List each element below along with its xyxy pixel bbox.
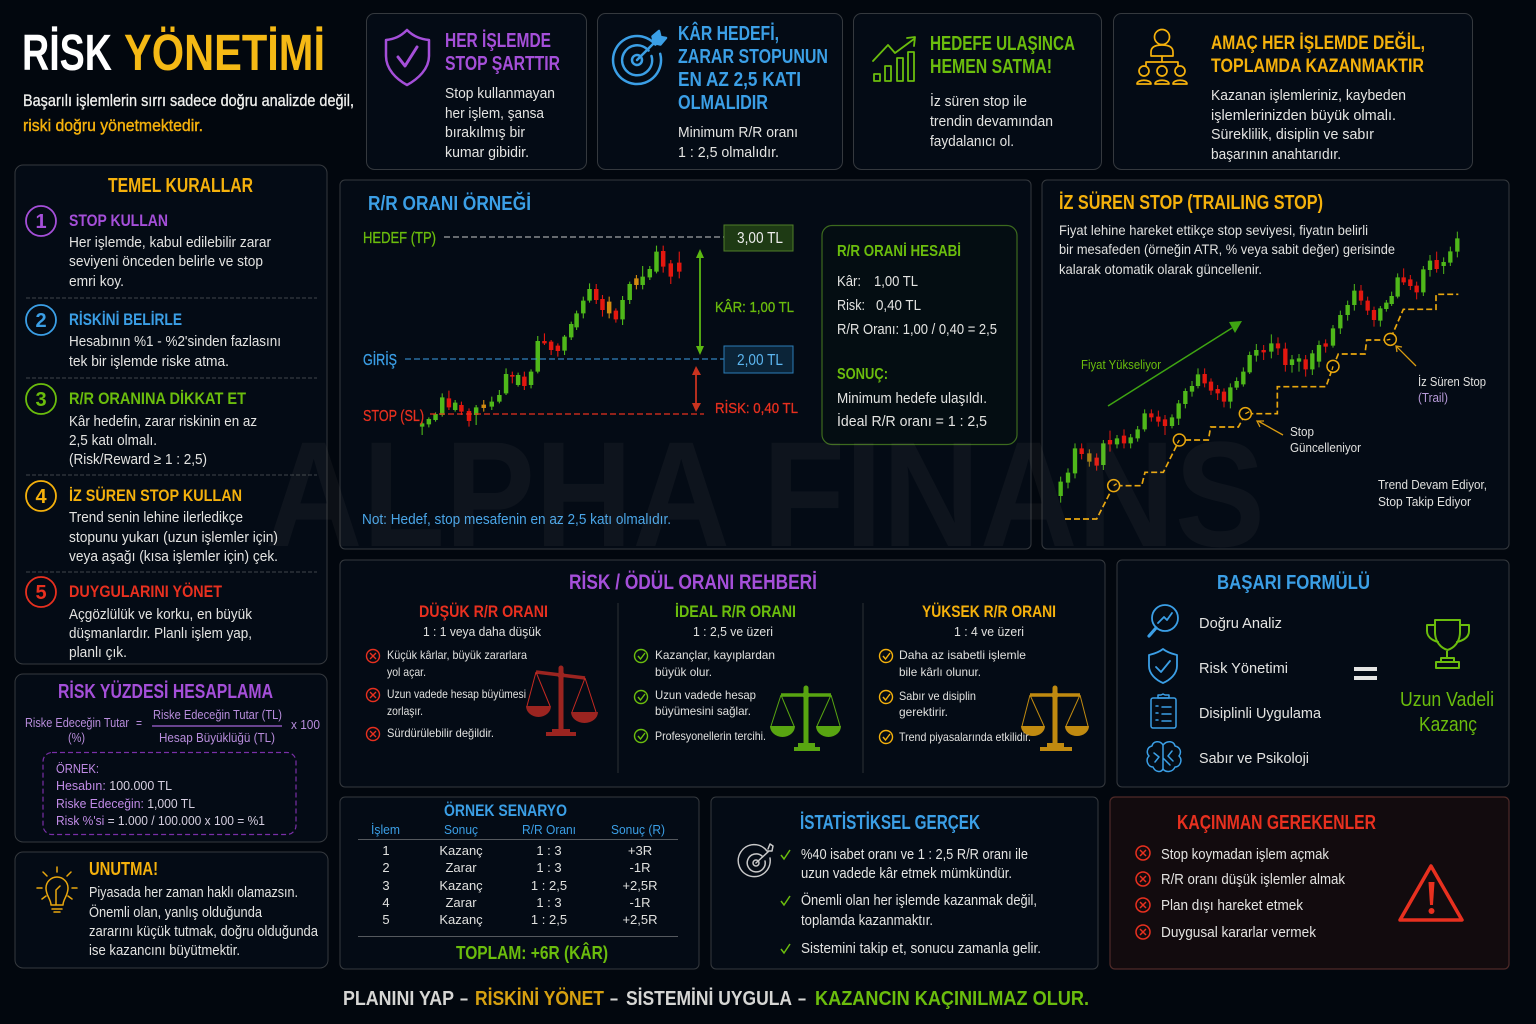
- rule 3: R/R ORANINA DİKKAT ET: [69, 389, 247, 408]
- entry level: [363, 346, 793, 373]
- heading: RİSK YÜZDESİ HESAPLAMA: [58, 680, 273, 703]
- formula: Riske Edeceğin Tutar (TL): [153, 707, 282, 722]
- panel: success formula: Risk Yönetimi: [1199, 660, 1288, 677]
- column: low R/R: DÜŞÜK R/R ORANI: [419, 602, 548, 621]
- heading: TOPLAMDA KAZANMAKTIR: [1211, 56, 1424, 77]
- rule 1: [26, 206, 271, 290]
- column: low R/R: [366, 602, 598, 740]
- target level: HEDEF (TP): [363, 230, 436, 247]
- entry level: GİRİŞ: [363, 350, 397, 369]
- rule 3: (Risk/Reward ≥ 1 : 2,5): [69, 451, 207, 468]
- column: low R/R: Sürdürülebilir değildir.: [387, 726, 494, 740]
- text block: toplamda kazanmaktır.: [801, 913, 933, 929]
- rule 1: emri koy.: [69, 273, 124, 290]
- icon: magnifier: [1149, 605, 1178, 636]
- text block: [89, 884, 319, 959]
- text block: kumar gibidir.: [445, 144, 529, 161]
- text block: Duygusal kararlar vermek: [1161, 925, 1317, 941]
- column: ideal R/R: Profesyonellerin tercihi.: [655, 729, 766, 743]
- rule 2: RİSKİNİ BELİRLE: [69, 310, 182, 329]
- callout: trend continues: Stop Takip Ediyor: [1378, 494, 1472, 509]
- footer slogan: –: [460, 988, 468, 1010]
- heading: HER İŞLEMDE: [445, 29, 551, 52]
- heading: OLMALIDIR: [678, 92, 768, 114]
- heading: EN AZ 2,5 KATI: [678, 69, 801, 91]
- panel: sample scenario: [340, 797, 699, 969]
- icon: purple shield: [386, 30, 429, 85]
- rule 5: [26, 577, 252, 661]
- heading: STOP ŞARTTIR: [445, 53, 560, 75]
- table: -1R: [630, 860, 650, 875]
- stop level: STOP (SL): [363, 408, 424, 425]
- rule 2: [26, 305, 281, 370]
- callout: trailing stop: [1396, 346, 1486, 405]
- icon: blue target: [613, 31, 666, 84]
- arrow: profit: KÂR: 1,00 TL: [715, 299, 794, 316]
- text block: her işlem, şansa: [445, 105, 545, 122]
- callout: stop updated: Stop: [1290, 424, 1314, 439]
- text block: R/R oranı düşük işlemler almak: [1161, 872, 1346, 888]
- text block: [1161, 847, 1346, 941]
- cross icons: [1136, 846, 1150, 939]
- panel: R/R calculation: R/R ORANİ HESABİ: [837, 242, 961, 260]
- panel: risk percent calculation: [15, 674, 327, 842]
- callout: stop updated: [1257, 421, 1362, 455]
- target level: [363, 225, 793, 251]
- heading: [445, 29, 560, 75]
- rule 3: 3: [35, 389, 47, 411]
- panel: R/R example: [340, 180, 1031, 549]
- panel: statistical fact: [711, 797, 1098, 969]
- title: RİSK: [22, 24, 112, 81]
- arrow: risk: RİSK: 0,40 TL: [715, 399, 798, 417]
- panel: reminder: [15, 852, 328, 968]
- panel: success formula: Sabır ve Psikoloji: [1199, 750, 1309, 767]
- formula: (%): [68, 730, 85, 745]
- panel: success formula: Doğru Analiz: [1199, 615, 1282, 632]
- panel: stop is a must: [366, 14, 586, 170]
- icon: red scales: [526, 666, 598, 736]
- text block: %40 isabet oranı ve 1 : 2,5 R/R oranı ile: [801, 847, 1028, 863]
- column: high R/R: gerektirir.: [899, 705, 948, 719]
- result text: Uzun Vadeli: [1400, 689, 1494, 711]
- rule 5: planlı çık.: [69, 644, 127, 661]
- panel: R/R calculation: R/R Oranı: 1,00 / 0,40 = 2,5: [837, 321, 997, 338]
- footer slogan: –: [610, 988, 618, 1010]
- text block: [1211, 87, 1406, 163]
- text block: [445, 85, 555, 161]
- table: Zarar: [445, 895, 477, 910]
- table: 4: [382, 895, 390, 910]
- panel: risk reward guide: [340, 560, 1105, 787]
- text block: zararını küçük tutmak, doğru olduğunda: [89, 923, 319, 940]
- column: low R/R: Uzun vadede hesap büyümesi: [387, 687, 526, 701]
- note: Not: Hedef, stop mesafenin en az 2,5 katı olmalıdır.: [362, 511, 671, 528]
- table: Sonuç (R): [611, 822, 665, 837]
- panel: goal: [1114, 14, 1472, 170]
- table: +3R: [628, 843, 652, 858]
- table: 3: [382, 878, 390, 893]
- table: R/R Oranı: [522, 822, 576, 837]
- heading: KAÇINMAN GEREKENLER: [1177, 812, 1376, 834]
- icon: gold scales: [1021, 686, 1089, 751]
- panel: do not sell at target: [854, 14, 1102, 170]
- table: Sonuç: [444, 822, 478, 837]
- panel: trailing stop: [1042, 180, 1509, 549]
- text block: Stop koymadan işlem açmak: [1161, 847, 1330, 863]
- text block: işlemlerinizden büyük olmalı.: [1211, 107, 1396, 124]
- text block: Piyasada her zaman haklı olamazsın.: [89, 884, 298, 901]
- column: ideal R/R: [634, 602, 841, 751]
- rule 2: tek bir işlemde riske atma.: [69, 353, 229, 370]
- rule 4: 4: [35, 486, 47, 508]
- text block: 1 : 2,5 olmalıdır.: [678, 144, 779, 161]
- panel: R/R calculation: 1,00 TL: [874, 273, 918, 290]
- icon: warning triangle: [1400, 866, 1462, 920]
- panel: profit target: [598, 14, 842, 170]
- panel: R/R calculation: Risk:: [837, 297, 865, 314]
- result text: [1400, 689, 1494, 736]
- footer slogan: [343, 987, 1089, 1010]
- trailing stop line: [1065, 294, 1458, 519]
- heading: [1211, 32, 1425, 77]
- example box: Hesabın: 100.000 TL: [56, 778, 172, 793]
- text block: [801, 847, 1041, 957]
- rule 4: stopunu yukarı (uzun işlemler için): [69, 529, 278, 546]
- heading: HEDEFE ULAŞINCA: [930, 33, 1075, 55]
- table: -1R: [630, 895, 650, 910]
- arrow: price rising: Fiyat Yükseliyor: [1081, 357, 1162, 372]
- table: 1: [382, 843, 390, 858]
- panel: R/R calculation: [822, 226, 1017, 444]
- text block: bırakılmış bir: [445, 124, 525, 141]
- icon: trophy: [1427, 620, 1469, 668]
- heading: UNUTMA!: [89, 859, 158, 879]
- rule 5: düşmanlardır. Planlı işlem yap,: [69, 625, 252, 642]
- column: low R/R: yol açar.: [387, 665, 426, 679]
- table: İşlem: [371, 822, 400, 837]
- heading: RİSK / ÖDÜL ORANI REHBERİ: [569, 571, 817, 594]
- text block: bir mesafeden (örneğin ATR, % veya sabit değer) gerisinde: [1059, 241, 1395, 257]
- icon: people: [1137, 30, 1187, 84]
- checks: [781, 850, 790, 953]
- rule 3: [26, 384, 257, 468]
- text block: kalarak otomatik olarak güncellenir.: [1059, 261, 1262, 277]
- candlestick chart: [1061, 232, 1457, 503]
- arrow: risk: [692, 366, 798, 417]
- text block: faydalanıcı ol.: [930, 133, 1014, 150]
- heading: ÖRNEK SENARYO: [444, 801, 567, 820]
- rule 1: STOP KULLAN: [69, 211, 168, 230]
- table: 5: [382, 912, 390, 927]
- panel: success formula: [1117, 560, 1509, 787]
- text block: Kazanan işlemleriniz, kaybeden: [1211, 87, 1406, 104]
- column: ideal R/R: Kazançlar, kayıplardan: [655, 648, 775, 662]
- heading: [678, 21, 828, 114]
- equals sign: [1354, 667, 1377, 680]
- column: ideal R/R: büyük olur.: [655, 665, 712, 679]
- rule 2: 2: [35, 310, 47, 332]
- candlestick chart: [422, 246, 679, 435]
- formula: x 100: [291, 717, 320, 732]
- entry level: 2,00 TL: [737, 352, 783, 369]
- icon: grey target: [738, 844, 773, 877]
- text block: Önemli olan her işlemde kazanmak değil,: [801, 891, 1037, 909]
- heading: BAŞARI FORMÜLÜ: [1217, 571, 1370, 594]
- column: high R/R: Sabır ve disiplin: [899, 689, 976, 703]
- text block: Fiyat lehine hareket ettikçe stop seviyesi, fiyatın belirli: [1059, 222, 1368, 238]
- footer slogan: PLANINI YAP: [343, 988, 454, 1010]
- column: high R/R: bile kârlı olunur.: [899, 665, 981, 679]
- heading: TEMEL KURALLAR: [108, 175, 253, 197]
- rule 1: seviyeni önceden belirle ve stop: [69, 253, 263, 270]
- column: high R/R: 1 : 4 ve üzeri: [954, 624, 1024, 639]
- icon: shield: [1149, 649, 1177, 683]
- table: Kazanç: [439, 878, 483, 893]
- heading: KÂR HEDEFİ,: [678, 21, 779, 45]
- title: YÖNETİMİ: [124, 24, 325, 81]
- rule 1: 1: [35, 211, 47, 233]
- table: [358, 822, 678, 936]
- text block: uzun vadede kâr etmek mümkündür.: [801, 866, 1012, 882]
- footer slogan: KAZANCIN KAÇINILMAZ OLUR.: [815, 988, 1089, 1010]
- rule 2: Hesabının %1 - %2'sinden fazlasını: [69, 333, 281, 350]
- text block: [930, 92, 1053, 150]
- formula: [25, 707, 320, 745]
- table: 2: [382, 860, 390, 875]
- title: [22, 24, 325, 81]
- icon: clipboard: [1151, 694, 1176, 728]
- callout: trailing stop: İz Süren Stop: [1418, 374, 1486, 389]
- formula: =: [136, 715, 142, 730]
- callout: stop updated: Güncelleniyor: [1290, 440, 1362, 455]
- column: ideal R/R: Uzun vadede hesap: [655, 688, 756, 702]
- table: 1 : 3: [536, 860, 562, 875]
- icon: green scales: [770, 686, 841, 751]
- heading: [930, 33, 1075, 78]
- formula: Riske Edeceğin Tutar: [25, 715, 130, 730]
- callout: trend continues: [1378, 477, 1487, 509]
- arrow: profit: [696, 249, 794, 355]
- subtitle: riski doğru yönetmektedir.: [23, 116, 203, 135]
- panel: R/R calculation: 0,40 TL: [876, 297, 921, 314]
- table: 1 : 2,5: [531, 912, 567, 927]
- text block: Sistemini takip et, sonucu zamanla gelir.: [801, 941, 1041, 957]
- column: ideal R/R: büyümesini sağlar.: [655, 704, 751, 718]
- rule 4: [26, 481, 278, 565]
- table: 1 : 3: [536, 843, 562, 858]
- rule 5: Açgözlülük ve korku, en büyük: [69, 606, 252, 623]
- rule 5: DUYGULARINI YÖNET: [69, 582, 223, 601]
- watermark: ALPHA FINANS: [265, 410, 1265, 578]
- column: low R/R: Küçük kârlar, büyük zararlara: [387, 648, 527, 662]
- callout: trailing stop: (Trail): [1418, 390, 1448, 405]
- total: TOPLAM: +6R (KÂR): [456, 942, 608, 963]
- table: +2,5R: [622, 878, 658, 893]
- text block: Önemli olan, yanlış olduğunda: [89, 903, 263, 921]
- table: 1 : 3: [536, 895, 562, 910]
- icon: light bulb: [37, 867, 77, 912]
- panel: basic rules: [15, 165, 327, 664]
- rule 4: Trend senin lehine ilerledikçe: [69, 509, 243, 526]
- heading: R/R ORANI ÖRNEĞİ: [368, 191, 531, 215]
- column: low R/R: zorlaşır.: [387, 704, 423, 718]
- panel: success formula: Disiplinli Uygulama: [1199, 705, 1322, 722]
- rule 1: Her işlemde, kabul edilebilir zarar: [69, 234, 271, 251]
- text block: İz süren stop ile: [930, 92, 1027, 110]
- rule 4: veya aşağı (kısa işlemler için) çek.: [69, 548, 278, 565]
- example box: Risk %'si = 1.000 / 100.000 x 100 = %1: [56, 813, 265, 828]
- rule 4: İZ SÜREN STOP KULLAN: [69, 486, 242, 505]
- heading: HEMEN SATMA!: [930, 56, 1052, 78]
- table: +2,5R: [622, 912, 658, 927]
- table: Kazanç: [439, 843, 483, 858]
- panel: things to avoid: [1110, 797, 1509, 969]
- text block: ise kazancını büyütmektir.: [89, 942, 240, 959]
- panel: R/R calculation: SONUÇ:: [837, 366, 888, 383]
- heading: İSTATİSTİKSEL GERÇEK: [800, 811, 980, 834]
- text block: Plan dışı hareket etmek: [1161, 898, 1304, 914]
- example box: ÖRNEK:: [56, 761, 99, 776]
- text block: Stop kullanmayan: [445, 85, 555, 102]
- panel: R/R calculation: Minimum hedefe ulaşıldı.: [837, 390, 987, 407]
- table: Zarar: [445, 860, 477, 875]
- subtitle: Başarılı işlemlerin sırrı sadece doğru analizde değil,: [23, 91, 354, 110]
- heading: İZ SÜREN STOP (TRAILING STOP): [1059, 191, 1323, 214]
- heading: ZARAR STOPUNUN: [678, 46, 828, 68]
- column: high R/R: YÜKSEK R/R ORANI: [922, 602, 1056, 621]
- column: high R/R: Daha az isabetli işlemle: [899, 648, 1026, 662]
- subtitle: [23, 91, 354, 135]
- text block: trendin devamından: [930, 113, 1053, 130]
- text block: Minimum R/R oranı: [678, 124, 798, 141]
- rule 3: Kâr hedefin, zarar riskinin en az: [69, 413, 257, 430]
- heading: AMAÇ HER İŞLEMDE DEĞİL,: [1211, 32, 1425, 54]
- panel: R/R calculation: İdeal R/R oranı = 1 : 2,5: [837, 412, 987, 430]
- text block: başarının anahtarıdır.: [1211, 146, 1341, 163]
- table: Kazanç: [439, 912, 483, 927]
- table: 1 : 2,5: [531, 878, 567, 893]
- icon: brain: [1147, 742, 1181, 771]
- column: ideal R/R: İDEAL R/R ORANI: [675, 602, 796, 621]
- arrow: price rising: [1081, 321, 1242, 406]
- text block: [678, 124, 798, 161]
- result text: Kazanç: [1419, 714, 1477, 736]
- footer slogan: RİSKİNİ YÖNET: [475, 987, 604, 1010]
- target level: 3,00 TL: [737, 230, 783, 247]
- example box: Riske Edeceğin: 1,000 TL: [56, 796, 195, 811]
- column: low R/R: 1 : 1 veya daha düşük: [423, 624, 541, 639]
- icon: growth chart: [873, 37, 915, 81]
- rule 5: 5: [35, 582, 47, 604]
- column: high R/R: [880, 602, 1089, 751]
- footer slogan: SİSTEMİNİ UYGULA: [626, 987, 792, 1010]
- text block: Süreklilik, disiplin ve sabır: [1211, 126, 1374, 143]
- footer slogan: –: [798, 988, 806, 1010]
- column: high R/R: Trend piyasalarında etkilidir.: [899, 730, 1031, 744]
- formula: Hesap Büyüklüğü (TL): [159, 730, 275, 745]
- rule 3: 2,5 katı olmalı.: [69, 432, 157, 449]
- text block: [1059, 222, 1395, 277]
- column: ideal R/R: 1 : 2,5 ve üzeri: [693, 624, 773, 639]
- example box: [43, 752, 296, 834]
- callout: trend continues: Trend Devam Ediyor,: [1378, 477, 1487, 492]
- panel: R/R calculation: Kâr:: [837, 273, 861, 290]
